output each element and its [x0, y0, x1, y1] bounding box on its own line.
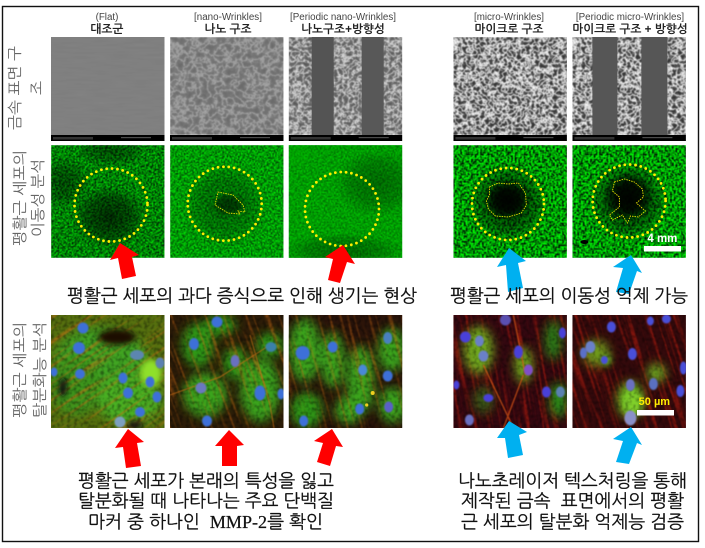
- header: periodic nano-wrinkles: [Periodic nano-Wrinkles]: [290, 12, 396, 23]
- migration outline: [609, 179, 645, 223]
- caption: migration suppression: 평활근 세포의 이동성 억제 가능: [450, 286, 688, 306]
- fluorescence image: periodic micro wrinkles: [572, 315, 686, 428]
- header: periodic nano-wrinkles: 나노구조+방향성: [301, 22, 385, 36]
- migration outline: [486, 183, 526, 217]
- row label: migration analysis: 이동성 분석: [30, 159, 47, 237]
- fluorescence image: micro wrinkles: [453, 315, 567, 428]
- header: flat: (Flat): [96, 12, 118, 23]
- migration image: nano wrinkles: [170, 145, 284, 258]
- header: flat: 대조군: [91, 23, 123, 36]
- blue arrow: periodic micro migration: [613, 255, 642, 294]
- caption: dedifferentiation suppression: 나노초레이저 텍스처링을 통해: [458, 471, 687, 491]
- scale bar: 50 µm: 50 µm: [639, 396, 670, 408]
- wound circle: [74, 168, 148, 242]
- header: micro-wrinkles: [micro-Wrinkles]: [474, 12, 544, 23]
- wound circle: [593, 164, 666, 238]
- header: nano-wrinkles: [nano-Wrinkles]: [194, 12, 262, 23]
- blue arrow: periodic micro fluorescence: [613, 427, 642, 464]
- caption: MMP-2 marker: [78, 471, 334, 532]
- fluorescence image: flat: [51, 315, 164, 428]
- row label: migration analysis: 평활근 세포의: [12, 150, 29, 246]
- row label: migration analysis: [12, 150, 47, 246]
- fluorescence image: nano wrinkles: [170, 315, 284, 428]
- red arrow: periodic nano migration: [325, 245, 355, 283]
- header: periodic micro-wrinkles: [572, 12, 688, 36]
- column headers: [91, 12, 688, 36]
- row label: dedifferentiation analysis: 탈분화능 분석: [32, 322, 49, 418]
- wound circle: [305, 172, 379, 246]
- header: micro-wrinkles: 마이크로 구조: [474, 23, 544, 36]
- red arrow: flat migration: [110, 243, 139, 279]
- row label: metal surface structure: 금속 표면 구: [7, 46, 24, 130]
- red arrow: flat fluorescence: [115, 429, 144, 468]
- row label: dedifferentiation analysis: 평활근 세포의: [12, 322, 29, 418]
- row label: metal surface structure: 조: [29, 81, 46, 95]
- blue arrow: micro fluorescence: [497, 421, 527, 458]
- caption: MMP-2 marker: 마커 중 하나인 MMP-2를 확인: [88, 512, 323, 532]
- wound circle: [472, 168, 544, 240]
- caption: overgrowth phenomenon: 평활근 세포의 과다 증식으로 인해 생기는 현상: [67, 286, 417, 306]
- header: periodic nano-wrinkles: [290, 12, 396, 36]
- wound circle: [188, 167, 262, 241]
- header: nano-wrinkles: [194, 12, 262, 36]
- scale bar: 50 µm: [637, 396, 674, 416]
- caption: dedifferentiation suppression: 근 세포의 탈분화 억제능 검증: [461, 512, 684, 532]
- fluorescence image: periodic nano wrinkles: [288, 315, 402, 428]
- SEM image: periodic micro wrinkles: [572, 37, 686, 141]
- row label: dedifferentiation analysis: [12, 322, 49, 418]
- caption: MMP-2 marker: 평활근 세포가 본래의 특성을 잃고: [78, 471, 334, 491]
- caption: MMP-2 marker: 탈분화될 때 나타나는 주요 단백질: [78, 491, 334, 511]
- header: periodic micro-wrinkles: [Periodic micro-Wrinkles]: [576, 12, 684, 23]
- SEM image: micro wrinkles: [453, 37, 567, 141]
- red arrow: nano fluorescence: [215, 430, 244, 466]
- SEM image: periodic nano wrinkles: [288, 37, 402, 141]
- header: periodic micro-wrinkles: 마이크로 구조 + 방향성: [572, 22, 688, 36]
- SEM image: flat: [51, 37, 164, 141]
- migration outline: [215, 192, 245, 214]
- caption: dedifferentiation suppression: 제작된 금속 표면에서의 평활: [461, 491, 684, 511]
- migration image: periodic nano wrinkles: [288, 145, 402, 258]
- scale bar: 4 mm: 4 mm: [647, 233, 677, 245]
- header: micro-wrinkles: [474, 12, 544, 36]
- migration image: periodic micro wrinkles: [572, 145, 686, 258]
- migration image: micro wrinkles: [453, 145, 567, 258]
- migration image: flat: [51, 145, 164, 258]
- SEM image: nano wrinkles: [170, 37, 284, 141]
- caption: dedifferentiation suppression: [458, 471, 687, 532]
- header: nano-wrinkles: 나노 구조: [204, 23, 252, 36]
- blue arrow: micro migration: [497, 248, 526, 292]
- red arrow: periodic nano fluorescence: [314, 429, 343, 466]
- row label: metal surface structure: [7, 46, 46, 130]
- header: flat: [91, 12, 123, 36]
